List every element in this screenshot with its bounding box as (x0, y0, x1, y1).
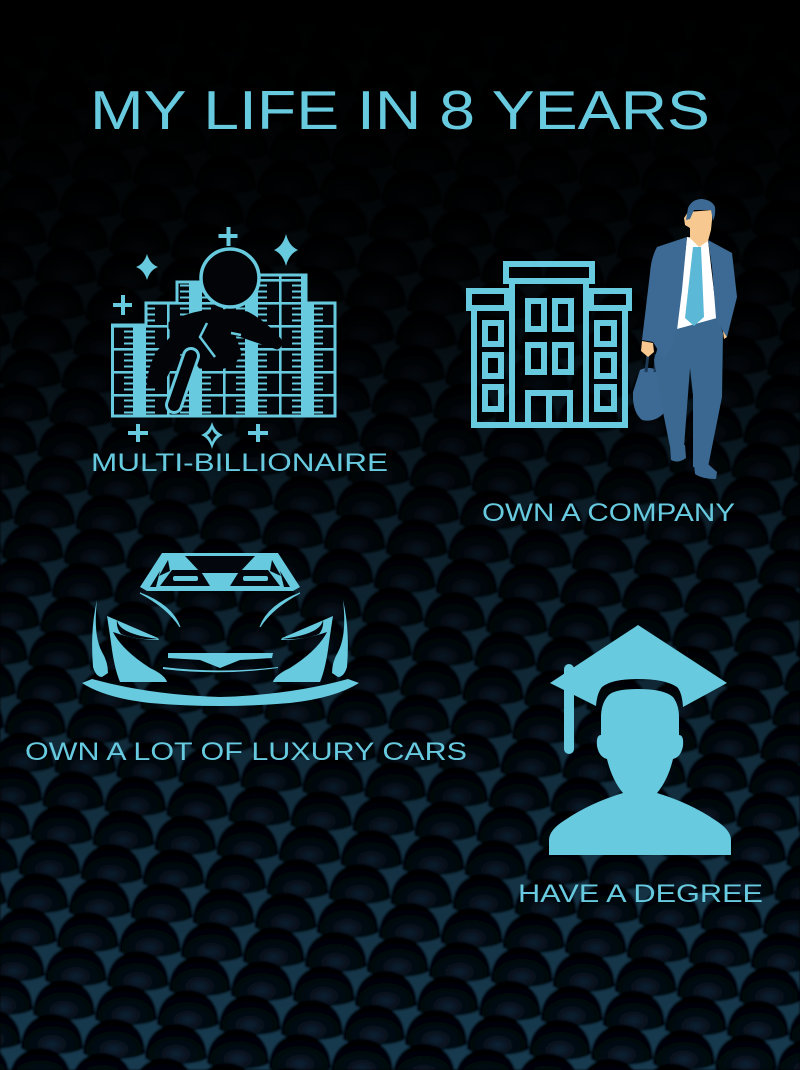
sparkles (113, 227, 298, 449)
title: MY LIFE IN 8 YEARS (90, 79, 710, 141)
jacket (642, 237, 737, 360)
left body details (92, 593, 180, 682)
icon: graduate with cap (549, 625, 731, 855)
icon: office building (469, 264, 629, 425)
head (684, 210, 712, 247)
icon: businessman with bag (633, 199, 737, 479)
shoes (670, 445, 717, 479)
tie (685, 247, 704, 326)
hands (641, 331, 727, 357)
trousers (654, 318, 723, 467)
head and shoulders (549, 689, 731, 855)
interior details (173, 576, 198, 581)
label: own a lot of luxury cars: OWN A LOT OF LUXURY CARS (25, 738, 467, 766)
windshield cut-outs (150, 556, 290, 587)
windshield frame (140, 553, 300, 591)
hair (686, 199, 715, 221)
person silhouette (148, 249, 281, 405)
money stacks (112, 275, 335, 416)
grille bar (168, 653, 273, 668)
icon: luxury car (82, 553, 359, 706)
right body details (260, 593, 348, 682)
splitter (82, 679, 359, 706)
label: have a degree: HAVE A DEGREE (518, 880, 763, 908)
bumper line (163, 667, 278, 672)
tassel (564, 669, 574, 749)
shirt (677, 237, 717, 329)
icon: multi-billionaire person on money stacks (112, 227, 335, 449)
label: multi-billionaire: MULTI-BILLIONAIRE (91, 449, 388, 477)
mortarboard (550, 625, 727, 707)
bag (633, 368, 665, 421)
label: own a company: OWN A COMPANY (482, 499, 735, 527)
